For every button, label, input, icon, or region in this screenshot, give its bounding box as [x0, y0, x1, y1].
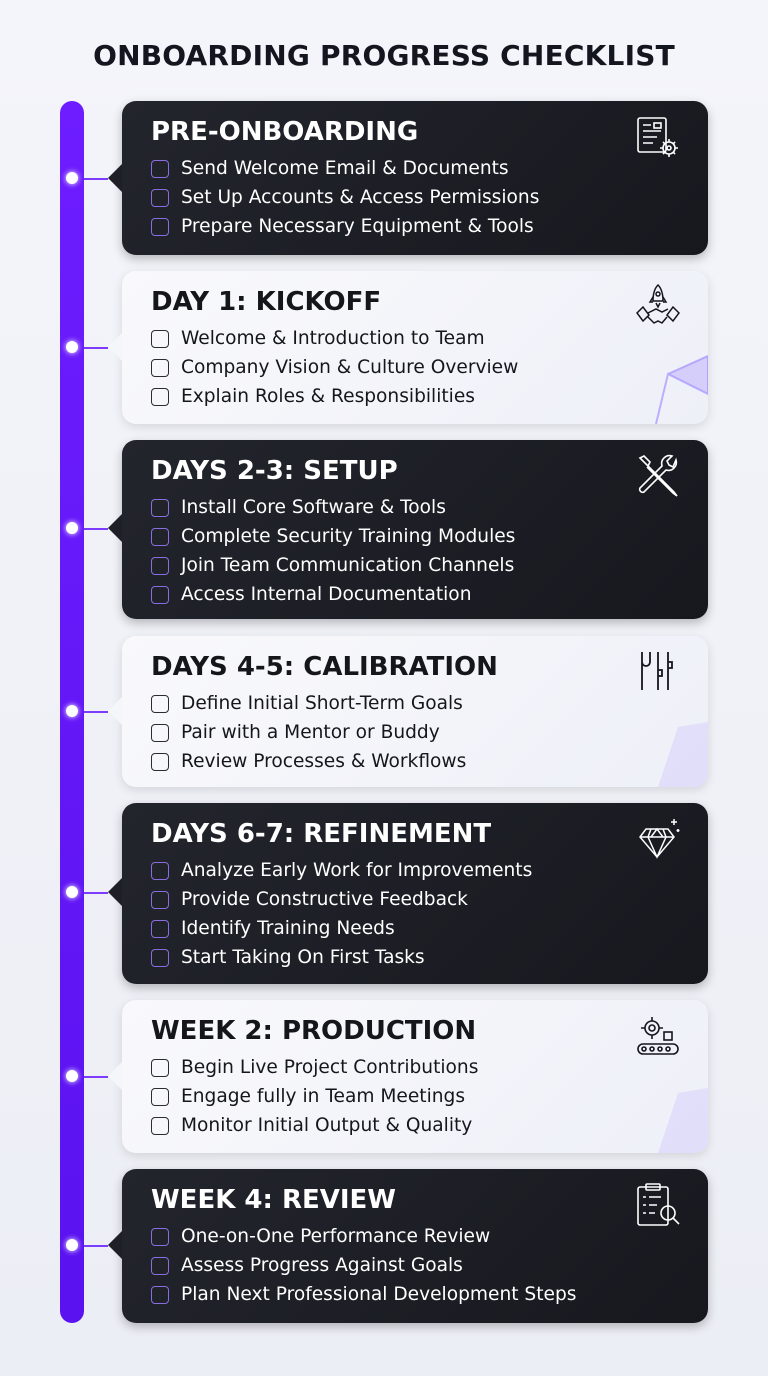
icon: diamond — [639, 819, 680, 859]
checklist: Explain Roles & Responsibilities — [181, 386, 475, 407]
heading: DAYS 4-5: CALIBRATION — [151, 652, 498, 682]
panel: days 6-7 — [122, 803, 708, 984]
checklist — [151, 328, 518, 407]
heading: WEEK 4: REVIEW — [151, 1185, 396, 1215]
checklist: Identify Training Needs — [181, 918, 395, 939]
timeline dots — [62, 168, 108, 1256]
heading: DAY 1: KICKOFF — [151, 287, 381, 317]
panel: day 1 — [122, 271, 708, 424]
checklist: One-on-One Performance Review — [181, 1226, 490, 1247]
checklist — [151, 860, 532, 968]
panel: pre-onboarding — [122, 101, 708, 255]
panel: week 2 — [122, 1000, 708, 1153]
checklist: Pair with a Mentor or Buddy — [181, 722, 440, 743]
icon: wrench screwdriver — [638, 454, 678, 497]
checklist: Assess Progress Against Goals — [181, 1255, 463, 1276]
decorative glow — [658, 722, 708, 787]
decorative glow — [655, 355, 708, 424]
checklist: Send Welcome Email & Documents — [181, 158, 509, 179]
icon: sliders — [641, 652, 673, 690]
checklist: Join Team Communication Channels — [181, 555, 514, 576]
icon: clipboard magnifier — [637, 1183, 680, 1226]
checklist: Complete Security Training Modules — [181, 526, 515, 547]
title: ONBOARDING PROGRESS CHECKLIST — [93, 39, 675, 72]
checklist: Define Initial Short-Term Goals — [181, 693, 463, 714]
checklist: Monitor Initial Output & Quality — [181, 1115, 472, 1136]
timeline bar — [60, 101, 84, 1323]
panel: days 2-3 — [122, 440, 708, 619]
checklist: Welcome & Introduction to Team — [181, 328, 485, 349]
icon: gear conveyor — [637, 1017, 679, 1055]
checklist: Engage fully in Team Meetings — [181, 1086, 465, 1107]
heading: PRE-ONBOARDING — [151, 117, 418, 147]
checklist — [151, 1226, 576, 1305]
checklist: Analyze Early Work for Improvements — [181, 860, 532, 881]
checklist: Install Core Software & Tools — [181, 497, 446, 518]
panel: week 4 — [122, 1169, 708, 1323]
checklist: Begin Live Project Contributions — [181, 1057, 478, 1078]
checklist — [151, 693, 466, 772]
checklist — [151, 497, 515, 605]
checklist: Access Internal Documentation — [181, 584, 471, 605]
checklist: Company Vision & Culture Overview — [181, 357, 518, 378]
checklist: Provide Constructive Feedback — [181, 889, 468, 910]
heading: DAYS 6-7: REFINEMENT — [151, 819, 491, 849]
panel: days 4-5 — [122, 636, 708, 787]
decorative glow — [658, 1088, 708, 1153]
icon: document gear — [637, 117, 678, 157]
checklist — [151, 1057, 478, 1136]
icon: rocket handshake — [636, 284, 680, 324]
heading: DAYS 2-3: SETUP — [151, 456, 398, 486]
checklist: Start Taking On First Tasks — [181, 947, 425, 968]
checklist: Set Up Accounts & Access Permissions — [181, 187, 539, 208]
checklist — [151, 158, 539, 237]
checklist: Plan Next Professional Development Steps — [181, 1284, 576, 1305]
checklist: Prepare Necessary Equipment & Tools — [181, 216, 534, 237]
checklist: Review Processes & Workflows — [181, 751, 466, 772]
heading: WEEK 2: PRODUCTION — [151, 1016, 476, 1046]
